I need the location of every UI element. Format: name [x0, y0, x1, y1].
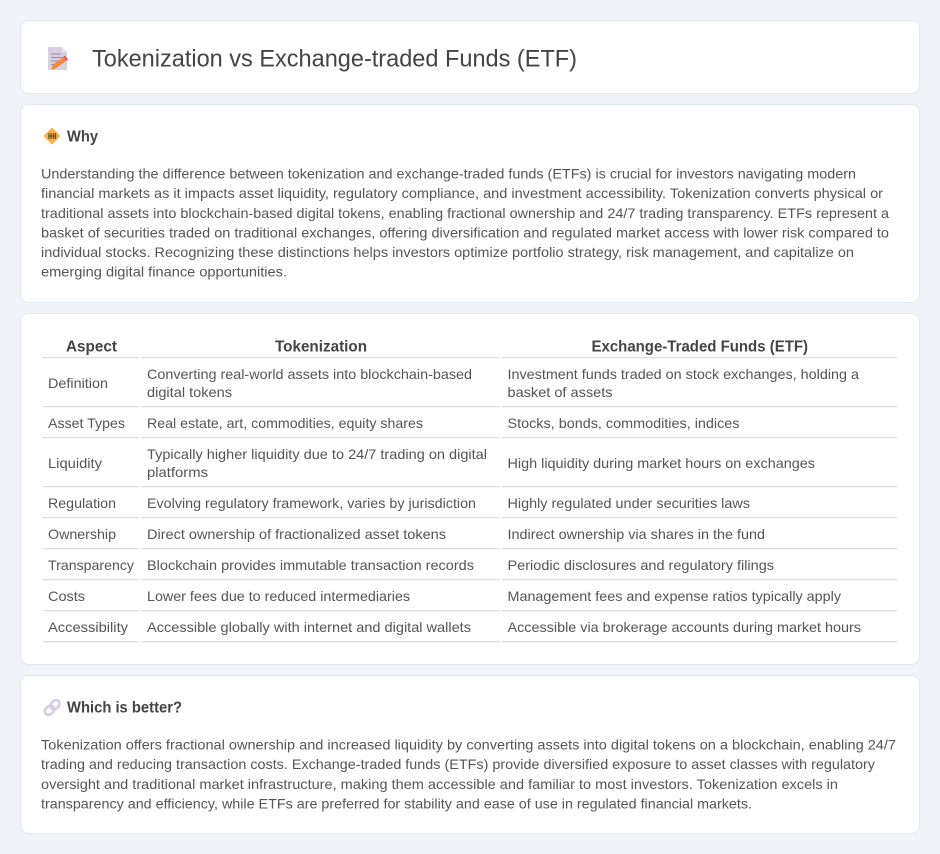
text block: which is better paragraph: Tokenization offers fractional ownership and increased liquidity by converting assets into digital tokens on a blockchain, enabling 24/7 — [41, 736, 896, 752]
table header row: Aspect — [66, 338, 118, 356]
heading: why: Why — [67, 128, 98, 146]
table row: definition: Converting real-world assets into blockchain-based — [147, 366, 472, 382]
text block: why paragraph: traditional assets into blockchain-based digital tokens, enabling fractional ownership and 24/7 trading transparency. ETFs represent a — [41, 205, 889, 221]
table row: costs: Costs — [48, 588, 85, 604]
table row: definition: digital tokens — [147, 384, 232, 400]
table row: costs: Lower fees due to reduced intermediaries — [147, 588, 410, 604]
table row: regulation: Evolving regulatory framework, varies by jurisdiction — [147, 495, 476, 511]
panel: why — [20, 104, 920, 302]
icon: chain link — [43, 699, 61, 716]
table row: asset types: Stocks, bonds, commodities, indices — [508, 415, 740, 431]
table row: asset types: Real estate, art, commodities, equity shares — [147, 415, 423, 431]
text block: which is better paragraph: transparency and efficiency, while ETFs are preferred for stability and ease of use in regulated financial markets. — [41, 796, 752, 812]
table row: ownership: Indirect ownership via shares in the fund — [508, 526, 765, 542]
table row: definition: Definition — [48, 375, 108, 391]
table row: transparency: Blockchain provides immutable transaction records — [147, 557, 474, 573]
heading: which is better: Which is better? — [67, 700, 182, 716]
table row: asset types — [48, 415, 740, 431]
table row: accessibility — [48, 619, 861, 635]
table row: liquidity: Typically higher liquidity due to 24/7 trading on digital — [147, 446, 487, 462]
table row: liquidity — [48, 446, 815, 480]
table row: transparency: Transparency — [48, 557, 134, 573]
table row: transparency: Periodic disclosures and regulatory filings — [508, 557, 774, 573]
text block: which is better paragraph: oversight and traditional market infrastructure, making them accessible and familiar to most investors. Tokenization excels in — [41, 776, 838, 792]
text block: why paragraph: individual stocks. Recognizing these distinctions helps investors optimize portfolio strategy, risk management, and capitalize on — [41, 244, 854, 260]
table row: costs: Management fees and expense ratios typically apply — [508, 588, 841, 604]
table row: definition: Investment funds traded on stock exchanges, holding a — [508, 366, 859, 382]
icon: orange diamond sign — [44, 128, 60, 144]
panel: title header — [20, 20, 920, 94]
table row: ownership: Direct ownership of fractionalized asset tokens — [147, 526, 446, 542]
table row: accessibility: Accessibility — [48, 619, 128, 635]
table row: costs — [48, 588, 841, 604]
table row: liquidity: Liquidity — [48, 455, 102, 471]
table row: definition — [48, 366, 859, 400]
table row: regulation — [48, 495, 750, 511]
text block: why paragraph: basket of securities traded on traditional exchanges, offering diversification and regulated market access with lower risk compared to — [41, 224, 889, 240]
table header row: Exchange-Traded Funds (ETF) — [592, 338, 808, 356]
text block: which is better paragraph — [41, 736, 896, 812]
table row: regulation: Regulation — [48, 495, 116, 511]
table header row: Tokenization — [275, 338, 367, 356]
table row: accessibility: Accessible globally with internet and digital wallets — [147, 619, 471, 635]
table row: regulation: Highly regulated under securities laws — [508, 495, 750, 511]
panel: which is better — [20, 676, 920, 834]
table row: accessibility: Accessible via brokerage accounts during market hours — [508, 619, 861, 635]
table row: definition: basket of assets — [508, 384, 612, 400]
table row: liquidity: platforms — [147, 464, 208, 480]
table row: transparency — [48, 557, 774, 573]
table header row — [66, 338, 808, 356]
table row: liquidity: High liquidity during market hours on exchanges — [508, 455, 815, 471]
table row: ownership — [48, 526, 765, 542]
table row: asset types: Asset Types — [48, 415, 125, 431]
panel: comparison table — [20, 314, 920, 664]
text block: which is better paragraph: trading and reducing transaction costs. Exchange-traded funds (ETFs) provide diversified exposure to asset classes with regulatory — [41, 756, 875, 772]
table row: ownership: Ownership — [48, 526, 116, 542]
text block: why paragraph — [41, 166, 889, 280]
icon: document with pencil — [48, 47, 68, 70]
title: Tokenization vs Exchange-traded Funds (ETF) — [92, 46, 577, 72]
text block: why paragraph: financial markets as it impacts asset liquidity, regulatory compliance, and investment accessibility. Tokenization converts physical or — [41, 185, 883, 201]
text block: why paragraph: emerging digital finance opportunities. — [41, 264, 287, 280]
text block: why paragraph: Understanding the difference between tokenization and exchange-traded funds (ETFs) is crucial for investors navigating modern — [41, 166, 856, 182]
